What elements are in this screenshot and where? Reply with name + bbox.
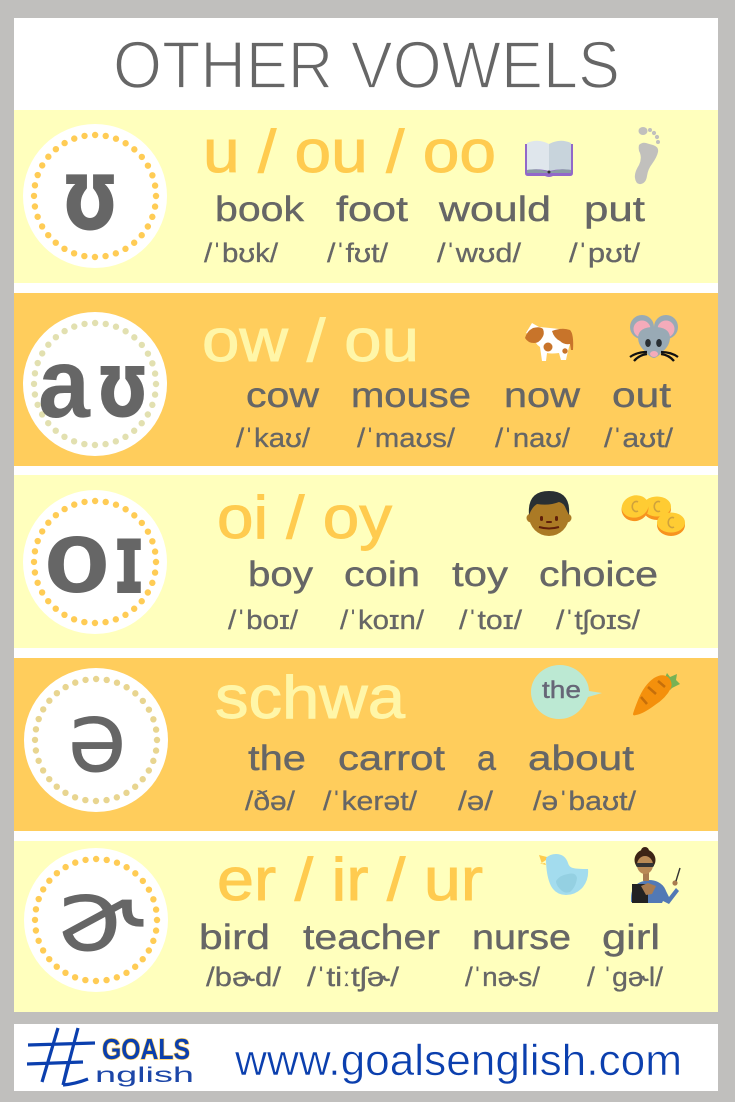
word: foot: foot: [336, 190, 408, 229]
phonetic: book: /ˈbʊk/: [204, 238, 279, 268]
phonetic: now: /ˈnaʊ/: [495, 423, 571, 453]
heading: schwa: [215, 664, 406, 731]
word: book: book: [215, 190, 305, 229]
word: coin: coin: [344, 555, 420, 594]
word: boy: boy: [248, 555, 314, 594]
logo word: nglish: nglish: [95, 1064, 194, 1087]
symbol badge: ə: [24, 668, 168, 812]
hash mark: [27, 1028, 95, 1085]
phonetic: toy: /ˈtoɪ/: [459, 605, 523, 635]
word: mouse: mouse: [351, 376, 471, 415]
panel: er / ir / ur: [14, 841, 718, 1012]
heading: ow / ou: [202, 307, 419, 374]
panel: u / ou / oo: [14, 110, 718, 283]
icon: book: [525, 141, 573, 177]
word: cow: cow: [246, 376, 320, 415]
word: out: out: [612, 376, 671, 415]
symbol badge: oɪ: o: [44, 499, 110, 615]
footer: [14, 1024, 718, 1091]
icon: boy: [526, 491, 572, 536]
icon: mouse: [630, 315, 678, 361]
word: toy: toy: [452, 555, 509, 594]
phonetic: nurse: /ˈnɚs/: [465, 962, 541, 992]
icon: footprint: [635, 127, 660, 184]
phonetic: carrot: /ˈkerət/: [323, 786, 418, 816]
word: carrot: carrot: [338, 739, 445, 778]
symbol badge: ʊ: [23, 124, 167, 268]
phonetic: the: /ðə/: [245, 786, 296, 816]
symbol badge: aʊ: ʊ: [95, 331, 150, 438]
icon: carrot: [633, 673, 680, 715]
icon: coins: [619, 492, 685, 536]
word: the: the: [248, 739, 306, 778]
phonetic: coin: /ˈkoɪn/: [340, 605, 425, 635]
icon: bird: [539, 854, 588, 895]
symbol badge: aʊ: [23, 312, 167, 456]
heading: oi / oy: [217, 484, 392, 551]
symbol badge: ɚ: ɚ: [56, 857, 144, 974]
word: would: would: [438, 190, 551, 229]
symbol badge: ə: ə: [67, 681, 127, 795]
phonetic: teacher: /ˈtiːtʃɚ/: [307, 962, 400, 992]
symbol badge: ɚ: [24, 848, 168, 992]
word: a: a: [477, 739, 497, 778]
phonetic: put: /ˈpʊt/: [569, 238, 641, 268]
symbol badge: aʊ: a: [38, 328, 91, 438]
word: girl: girl: [602, 918, 660, 957]
icon: teacher: [631, 847, 680, 904]
word: put: put: [584, 190, 645, 229]
phonetic: about: /əˈbaʊt/: [533, 786, 637, 816]
word: choice: choice: [539, 555, 658, 594]
panel: ow / ou: [14, 293, 718, 466]
heading: u / ou / oo: [203, 118, 496, 185]
panel: schwa: [14, 658, 718, 831]
icon: cow: [525, 323, 573, 361]
phonetic: girl: / ˈgɚl/: [587, 962, 664, 992]
phonetic: bird: /bɚd/: [206, 962, 282, 992]
phonetic: would: /ˈwʊd/: [437, 238, 522, 268]
panel: oi / oy: [14, 475, 718, 648]
word: nurse: nurse: [472, 918, 571, 957]
phonetic: a: /ə/: [458, 786, 494, 816]
symbol badge: oɪ: ɪ: [112, 500, 146, 617]
phonetic: cow: /ˈkaʊ/: [236, 423, 311, 453]
title: OTHER VOWELS: [113, 28, 620, 103]
website url: www.goalsenglish.com: [234, 1036, 682, 1085]
symbol badge: ʊ: ʊ: [60, 136, 120, 253]
logo: Goals English: [27, 1028, 194, 1087]
symbol badge: oɪ: [23, 490, 167, 634]
phonetic: choice: /ˈtʃoɪs/: [556, 605, 641, 635]
phonetic: mouse: /ˈmaʊs/: [357, 423, 456, 453]
phonetic: foot: /ˈfʊt/: [327, 238, 389, 268]
heading: er / ir / ur: [217, 846, 483, 913]
phonetic: out: /ˈaʊt/: [604, 423, 674, 453]
word: bird: bird: [199, 918, 270, 957]
icon: speech bubble the: [531, 665, 602, 719]
word: about: about: [528, 739, 634, 778]
word: teacher: teacher: [303, 918, 440, 957]
word: now: now: [504, 376, 581, 415]
icon: speech bubble the: the: [542, 677, 581, 704]
phonetic: boy: /ˈboɪ/: [228, 605, 299, 635]
logo word: GOALS: GOALS: [102, 1034, 190, 1066]
